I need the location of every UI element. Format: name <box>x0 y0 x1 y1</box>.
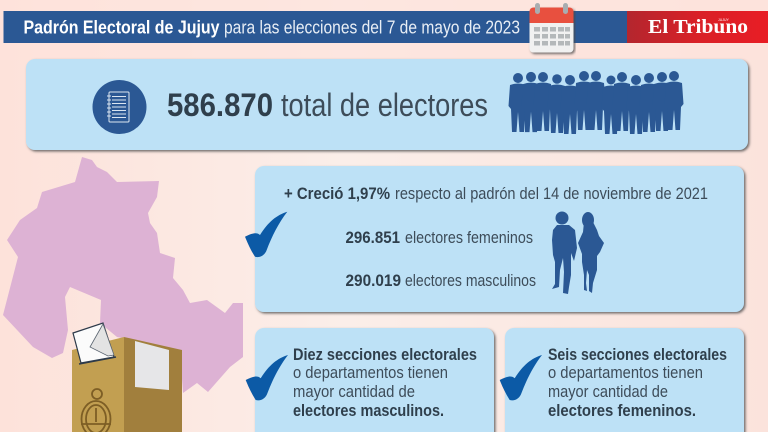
total value text <box>167 87 488 123</box>
ballot box label <box>135 341 169 390</box>
coat of arms <box>81 389 111 432</box>
panel: growth <box>255 166 744 312</box>
female sections text: mayor cantidad de <box>548 383 668 401</box>
female electors: 296.851 <box>346 228 400 247</box>
female sections text: electores femeninos. <box>548 402 696 420</box>
map of Jujuy <box>3 157 243 393</box>
male sections text: electores masculinos. <box>293 402 444 420</box>
male sections text: o departamentos tienen <box>293 364 448 382</box>
female electors <box>346 228 533 247</box>
female electors: electores femeninos <box>405 228 533 247</box>
panel: male sections <box>255 328 494 432</box>
male electors <box>346 271 536 290</box>
icon: crowd silhouette <box>508 71 684 134</box>
header title: para las elecciones del 7 de mayo de 2023 <box>224 18 520 38</box>
ballot envelope <box>73 323 116 364</box>
icon: calendar <box>530 3 574 52</box>
male electors: 290.019 <box>346 271 401 290</box>
check mark: growth <box>245 212 287 257</box>
panel: total electors <box>26 59 748 150</box>
male sections text: Diez secciones electorales <box>293 346 477 364</box>
total value text: 586.870 <box>167 87 273 123</box>
female sections text: Seis secciones electorales <box>548 346 727 364</box>
icon: man and woman silhouettes <box>552 212 604 294</box>
growth text <box>284 184 708 203</box>
header title <box>24 18 520 38</box>
logo: El Tribuno <box>627 11 768 43</box>
panel: female sections <box>505 328 744 432</box>
logo: El Tribuno: JUJUY <box>718 18 730 22</box>
growth text: respecto al padrón del 14 de noviembre de 2021 <box>395 184 708 203</box>
female sections text: o departamentos tienen <box>548 364 703 382</box>
header title: Padrón Electoral de Jujuy <box>24 18 220 38</box>
growth text: + Creció 1,97% <box>284 184 390 203</box>
check mark: female sections <box>500 355 542 400</box>
female sections text <box>548 346 727 420</box>
male electors: electores masculinos <box>405 271 536 290</box>
ballot box <box>72 323 182 432</box>
icon: notebook <box>92 80 146 134</box>
header bar <box>4 11 628 43</box>
male sections text <box>293 346 477 420</box>
logo: El Tribuno: El Tribuno <box>648 16 748 38</box>
male sections text: mayor cantidad de <box>293 383 415 401</box>
total value text: total de electores <box>281 87 488 123</box>
check mark: male sections <box>246 355 288 400</box>
